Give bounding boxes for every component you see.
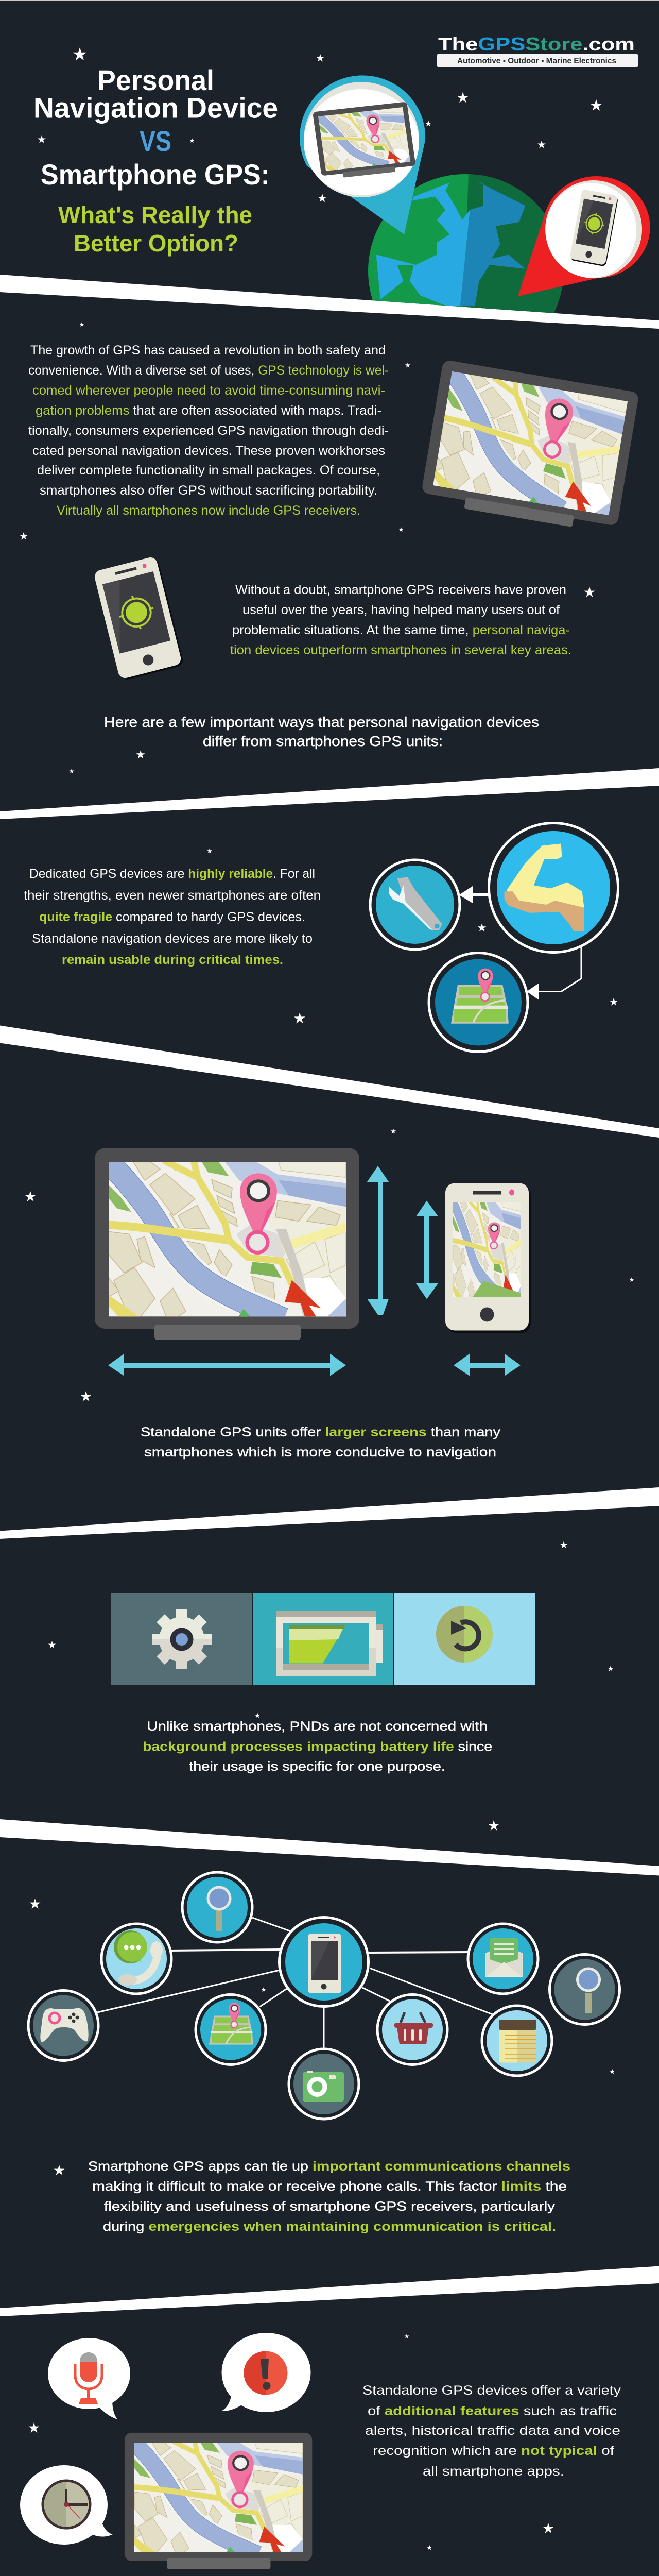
arrows: size comparison (108, 1166, 521, 1376)
speech bubble: microphone (48, 2338, 130, 2419)
node: map (196, 1995, 266, 2065)
arrow: arm to map (527, 946, 581, 1000)
title: Smartphone GPS: (41, 158, 270, 191)
heading: ways they differ (104, 714, 539, 749)
icon: large navigation device (95, 1148, 359, 1340)
title: VS (140, 125, 171, 157)
intro text: The growth of GPS has caused a revolution in both safety and (30, 343, 386, 358)
reliability text: Dedicated GPS devices are highly reliable. For all (29, 867, 315, 881)
node: shopping basket (377, 1995, 447, 2065)
features text (362, 2383, 621, 2479)
battery text: background processes impacting battery life since (143, 1739, 492, 1754)
connectors (97, 1918, 493, 2048)
smartphone paragraph: useful over the years, having helped many users out of (242, 603, 560, 617)
intro text: gation problems that are often associated with maps. Tradi- (36, 403, 381, 418)
smartphone paragraph: Without a doubt, smartphone GPS receivers have proven (235, 583, 566, 597)
title: Better Option? (74, 230, 238, 257)
communications text: during emergencies when maintaining communication is critical. (103, 2219, 556, 2234)
node: camera (289, 2049, 359, 2119)
node: notepad (482, 2006, 552, 2076)
icon: flexed arm circle (489, 823, 618, 952)
panel: battery (253, 1593, 393, 1685)
diagram: smartphone app network (28, 1872, 620, 2119)
logo: TheGPSStore.com: Automotive ▪ Outdoor ▪ Marine Electronics (457, 57, 616, 65)
communications text: Smartphone GPS apps can tie up important communications channels (88, 2159, 570, 2174)
speech bubble: clock (20, 2465, 113, 2545)
reliability text: quite fragile compared to hardy GPS devices. (39, 910, 305, 924)
features text: recognition which are not typical of (373, 2444, 614, 2458)
panel: gear (111, 1593, 252, 1685)
icon: large smartphone (445, 1183, 531, 1333)
smartphone paragraph: tion devices outperform smartphones in several key areas . (230, 643, 571, 657)
intro text: Virtually all smartphones now include GPS receivers. (57, 503, 360, 518)
logo: TheGPSStore.com (437, 33, 638, 67)
arrow: arm to wrench (459, 886, 488, 903)
battery text: Unlike smartphones, PNDs are not concerned with (147, 1719, 488, 1734)
battery text: their usage is specific for one purpose. (189, 1759, 445, 1774)
battery text (143, 1719, 492, 1774)
node: mail (468, 1924, 538, 1994)
icon: wrench circle (370, 860, 460, 950)
node: game controller (28, 1991, 98, 2061)
communications text: flexibility and usefulness of smartphone GPS receivers, particularly (104, 2199, 556, 2214)
intro text: convenience. With a diverse set of uses, GPS technology is wel- (28, 363, 389, 378)
title: What's Really the (58, 201, 252, 228)
node: smartphone hub (279, 1918, 369, 2006)
communications text: making it difficult to make or receive phone calls. This factor limits the (92, 2179, 567, 2194)
icon: features navigation device (125, 2433, 312, 2569)
heading: ways they differ: Here are a few important ways that personal navigation devices (104, 714, 539, 730)
speech bubble: alert (221, 2333, 311, 2412)
title: Personal (97, 64, 214, 96)
smartphone paragraph (230, 583, 571, 657)
features text: all smartphone apps. (423, 2464, 564, 2479)
illustration: globe (368, 174, 562, 313)
features text: of additional features such as traffic (368, 2404, 617, 2418)
icon: tilted smartphone (93, 555, 184, 682)
intro text (28, 343, 389, 518)
node: phone call (101, 1924, 171, 1994)
intro text: cated personal navigation devices. These proven workhorses (32, 444, 385, 458)
larger screens text: Standalone GPS units offer larger screens than many (141, 1425, 501, 1439)
reliability text (24, 867, 321, 967)
intro text: tionally, consumers experienced GPS navigation through dedi- (28, 423, 389, 438)
icon: red map pin with smartphone (518, 176, 650, 296)
diagram: reliability circles (370, 823, 618, 1052)
larger screens text (141, 1425, 501, 1460)
reliability text: their strengths, even newer smartphones are often (24, 888, 321, 903)
logo: TheGPSStore.com: The GPS Store .com (438, 33, 635, 55)
reliability text: remain usable during critical times. (62, 953, 283, 967)
heading: ways they differ: differ from smartphones GPS units: (203, 733, 443, 749)
intro text: smartphones also offer GPS without sacrificing portability. (40, 483, 377, 498)
node: magnifier right (550, 1955, 620, 2025)
intro text: deliver complete functionality in small packages. Of course, (37, 463, 380, 478)
icon: blue map pin with tablet (300, 75, 425, 234)
smartphone paragraph: problematic situations. At the same time, personal naviga- (232, 623, 570, 637)
title (33, 64, 278, 257)
icon: map circle (429, 953, 528, 1052)
node: magnifier (182, 1872, 252, 1942)
panel: refresh (394, 1593, 535, 1685)
intro text: comed wherever people need to avoid time-consuming navi- (32, 383, 385, 398)
features text: alerts, historical traffic data and voice (365, 2424, 620, 2438)
title: Navigation Device (33, 92, 278, 124)
communications text (88, 2159, 570, 2234)
icon: tilted navigation device (420, 360, 639, 534)
larger screens text: smartphones which is more conducive to navigation (144, 1445, 496, 1460)
features text: Standalone GPS devices offer a variety (362, 2383, 621, 2398)
reliability text: Standalone navigation devices are more likely to (32, 931, 313, 946)
